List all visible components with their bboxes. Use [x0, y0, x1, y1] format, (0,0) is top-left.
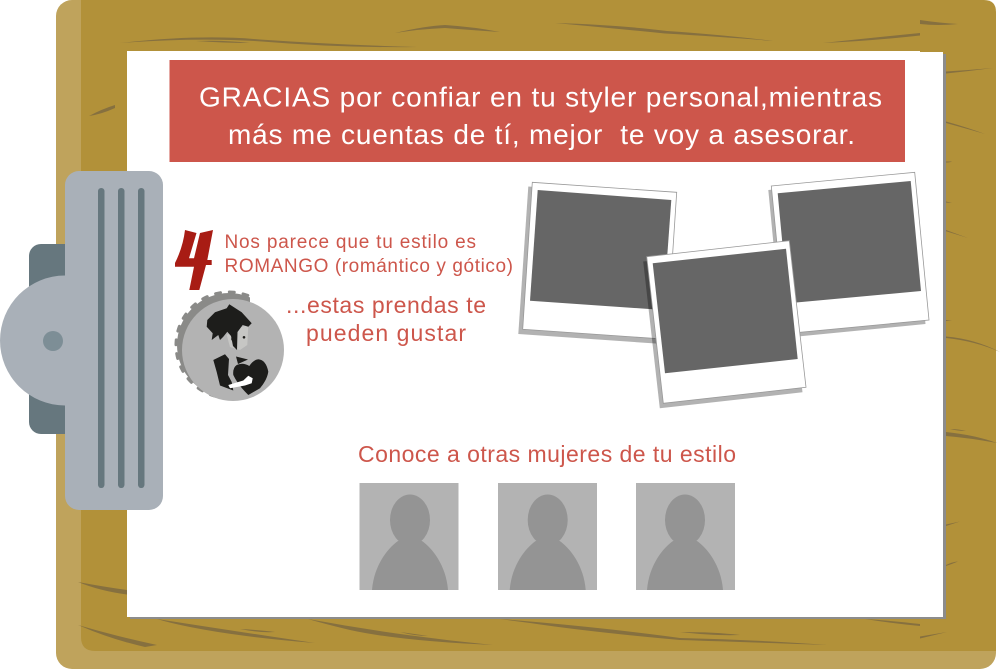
step number 4: [175, 230, 213, 290]
style description text: [224, 232, 513, 277]
text: these garments may suit you: pueden gustar: [306, 320, 466, 346]
polaroid right: [768, 172, 929, 338]
polaroid center: [643, 241, 806, 408]
portrait placeholder 3: [636, 483, 735, 590]
heading: meet other women: Conoce a otras mujeres de tu estilo: [358, 441, 736, 467]
arm: [228, 376, 253, 388]
clip back tab: [29, 244, 89, 434]
clip plate with three grooves: [65, 171, 163, 510]
text: these garments may suit you: [286, 292, 486, 346]
bottle cap back: [174, 290, 250, 398]
style description text: Nos parece que tu estilo es: [224, 232, 476, 253]
face: [227, 325, 248, 350]
clip pivot half circle: [0, 276, 130, 406]
banner: thanks message: [170, 60, 905, 162]
portrait placeholder 2: [498, 483, 597, 590]
hair: [207, 304, 252, 350]
banner: thanks message: GRACIAS por confiar en tu styler personal,mientras: [199, 82, 882, 112]
gothic character: [207, 304, 268, 395]
polaroid left: [518, 182, 677, 344]
banner: thanks message: más me cuentas de tí, mejor te voy a asesorar.: [228, 119, 855, 150]
portrait placeholder 1: [360, 483, 458, 590]
clip pivot rivet: [43, 331, 63, 351]
paper sheet: [127, 51, 946, 619]
bottle cap face: [182, 299, 284, 401]
text: these garments may suit you: ...estas prendas te: [286, 292, 486, 318]
bottle cap badge with gothic character: [176, 292, 284, 401]
eyes: [231, 337, 235, 341]
jacket: [213, 354, 233, 390]
metal clip: [0, 171, 163, 510]
heart: [233, 359, 268, 395]
style description text: ROMANGO (romántico y gótico): [224, 256, 513, 277]
